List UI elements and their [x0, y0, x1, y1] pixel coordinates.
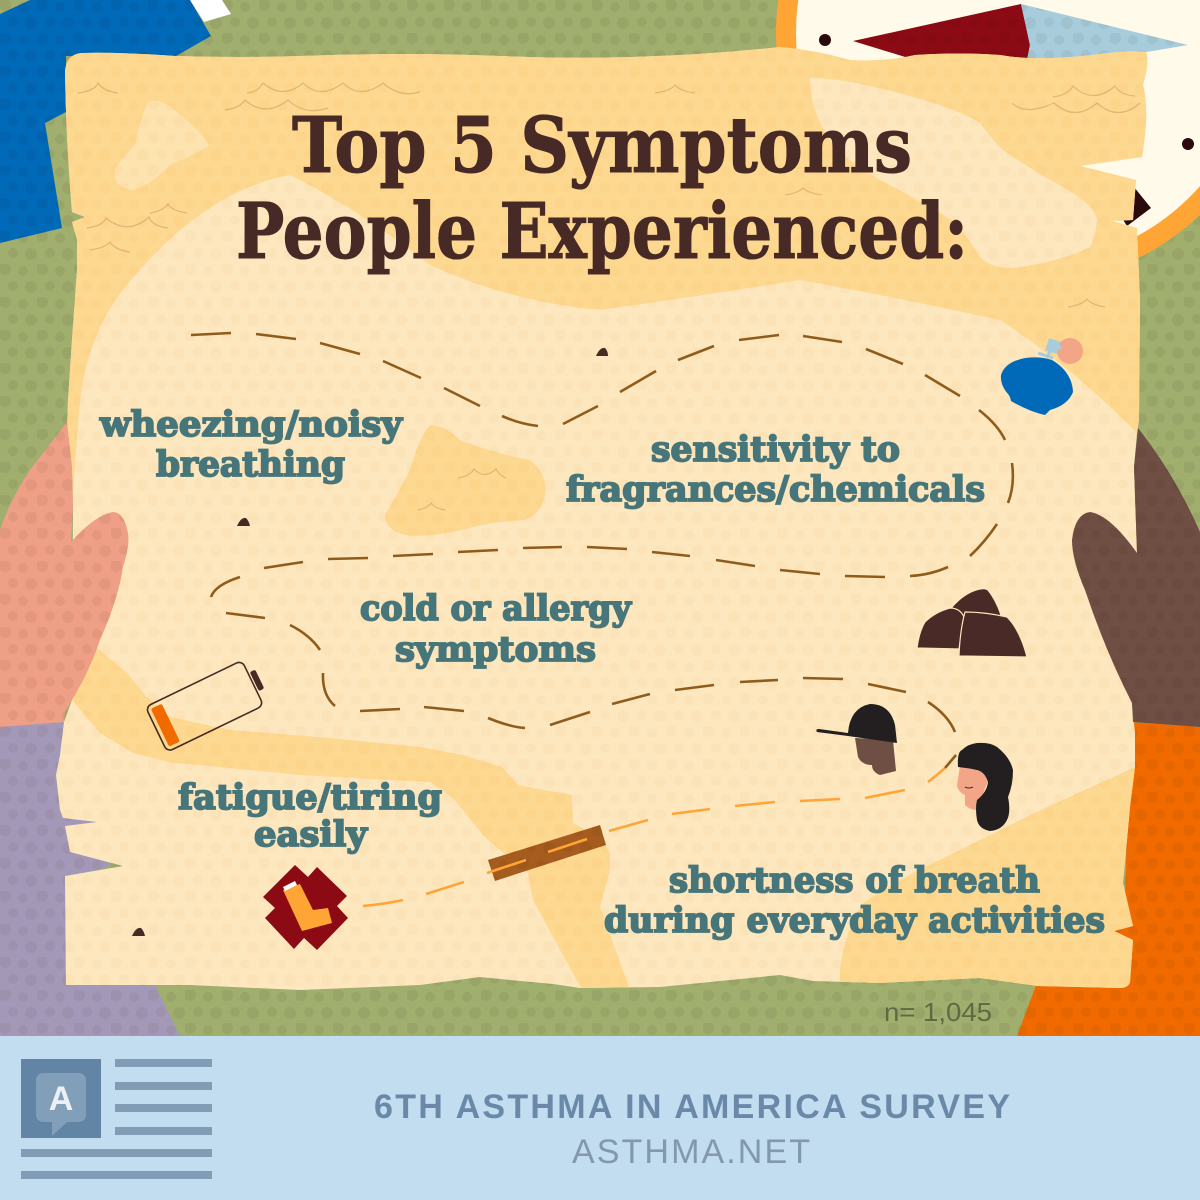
left rock [917, 608, 964, 649]
icon: perfume bottle [1001, 338, 1083, 415]
woman face [957, 766, 992, 810]
icon: empty battery [146, 657, 271, 752]
compass needle texture [853, 4, 1188, 60]
compass [786, 0, 1200, 274]
salmon hand shape [0, 422, 128, 727]
white cuff [190, 0, 231, 22]
sample size note: n= 1,045 [884, 997, 992, 1027]
icon: small mound west [237, 518, 250, 526]
right rock [959, 612, 1027, 657]
map island: north west [115, 100, 209, 190]
trail: orange dashes [363, 768, 945, 906]
logo square [21, 1059, 101, 1138]
map parchment [40, 30, 1170, 1000]
map dark upper land [40, 30, 1170, 490]
label: wheezing: wheezing/noisy [99, 404, 404, 445]
label: cold or allergy [360, 588, 633, 670]
inhaler body [283, 884, 332, 931]
compass marker left [819, 34, 831, 46]
perfume bottle body [1001, 357, 1073, 415]
man face [855, 738, 896, 775]
speech bubble [36, 1073, 86, 1136]
map island: north east [810, 78, 1097, 268]
label: sensitivity: sensitivity to [651, 429, 900, 470]
label: shortness of breath: shortness of breath [669, 860, 1040, 901]
map waves [78, 83, 1140, 510]
brown hand shape [1072, 428, 1200, 727]
label: cold or allergy: symptoms [395, 629, 596, 670]
blue shirt sleeve, top left [0, 0, 211, 243]
footer heading: 6TH ASTHMA IN AMERICA SURVEY [374, 1088, 1010, 1126]
brown hand [1072, 428, 1200, 727]
map dark south-east land [840, 767, 1135, 988]
red X mark [263, 865, 348, 950]
battery terminal [250, 670, 264, 691]
letter A: A [49, 1080, 73, 1118]
title: Top 5 Symptoms [292, 101, 912, 191]
woman mouth [965, 787, 973, 788]
icon: small mound north [596, 348, 608, 356]
compass ring [786, 0, 1200, 274]
map island: centre [385, 425, 545, 536]
trail: dark dashes [191, 333, 1013, 768]
label: sensitivity: fragrances/chemicals [566, 469, 985, 510]
compass needle: dark tail [1120, 187, 1151, 226]
title: People Experienced: [236, 187, 968, 277]
footer url: ASTHMA.NET [572, 1133, 810, 1171]
label: sensitivity [566, 429, 985, 510]
icon: small mound south [132, 928, 145, 936]
label: fatigue: easily [254, 814, 369, 855]
map speckle [40, 30, 1170, 1000]
treasure map [40, 30, 1170, 1000]
map river [72, 648, 630, 990]
footer band [0, 1036, 1200, 1200]
label: fatigue: fatigue/tiring [178, 777, 442, 818]
compass marker right [1182, 138, 1194, 150]
perfume nozzle [1038, 340, 1062, 358]
salmon hand [0, 422, 128, 727]
purple sleeve, bottom left [0, 722, 180, 1036]
battery casing [146, 660, 264, 752]
compass needle: red [853, 4, 1030, 60]
label: shortness of breath: during everyday activities [604, 900, 1105, 941]
back rock [952, 589, 1001, 640]
woman hair [958, 743, 1013, 831]
perfume bulb [1057, 338, 1083, 364]
label: shortness of breath [604, 860, 1105, 941]
salmon hand speckle [0, 422, 128, 727]
icon: treasure X with inhaler [263, 865, 348, 950]
label: fatigue [178, 777, 442, 855]
icon: woman [957, 743, 1013, 831]
orange sleeve, bottom right [1017, 722, 1200, 1036]
article lines [21, 1059, 212, 1179]
label: cold or allergy: cold or allergy [360, 588, 633, 629]
icon: rocks [917, 589, 1027, 657]
compass needle: blue [1021, 4, 1188, 60]
inhaler cap [283, 881, 297, 891]
battery charge [151, 704, 180, 747]
label: wheezing: breathing [156, 444, 345, 485]
label: wheezing [99, 404, 404, 485]
brown hand speckle [1072, 428, 1200, 727]
bridge plank [488, 825, 606, 881]
title [236, 101, 968, 277]
footer icon: article [21, 1059, 212, 1179]
man cap [816, 704, 897, 743]
icon: man with cap [816, 704, 897, 775]
